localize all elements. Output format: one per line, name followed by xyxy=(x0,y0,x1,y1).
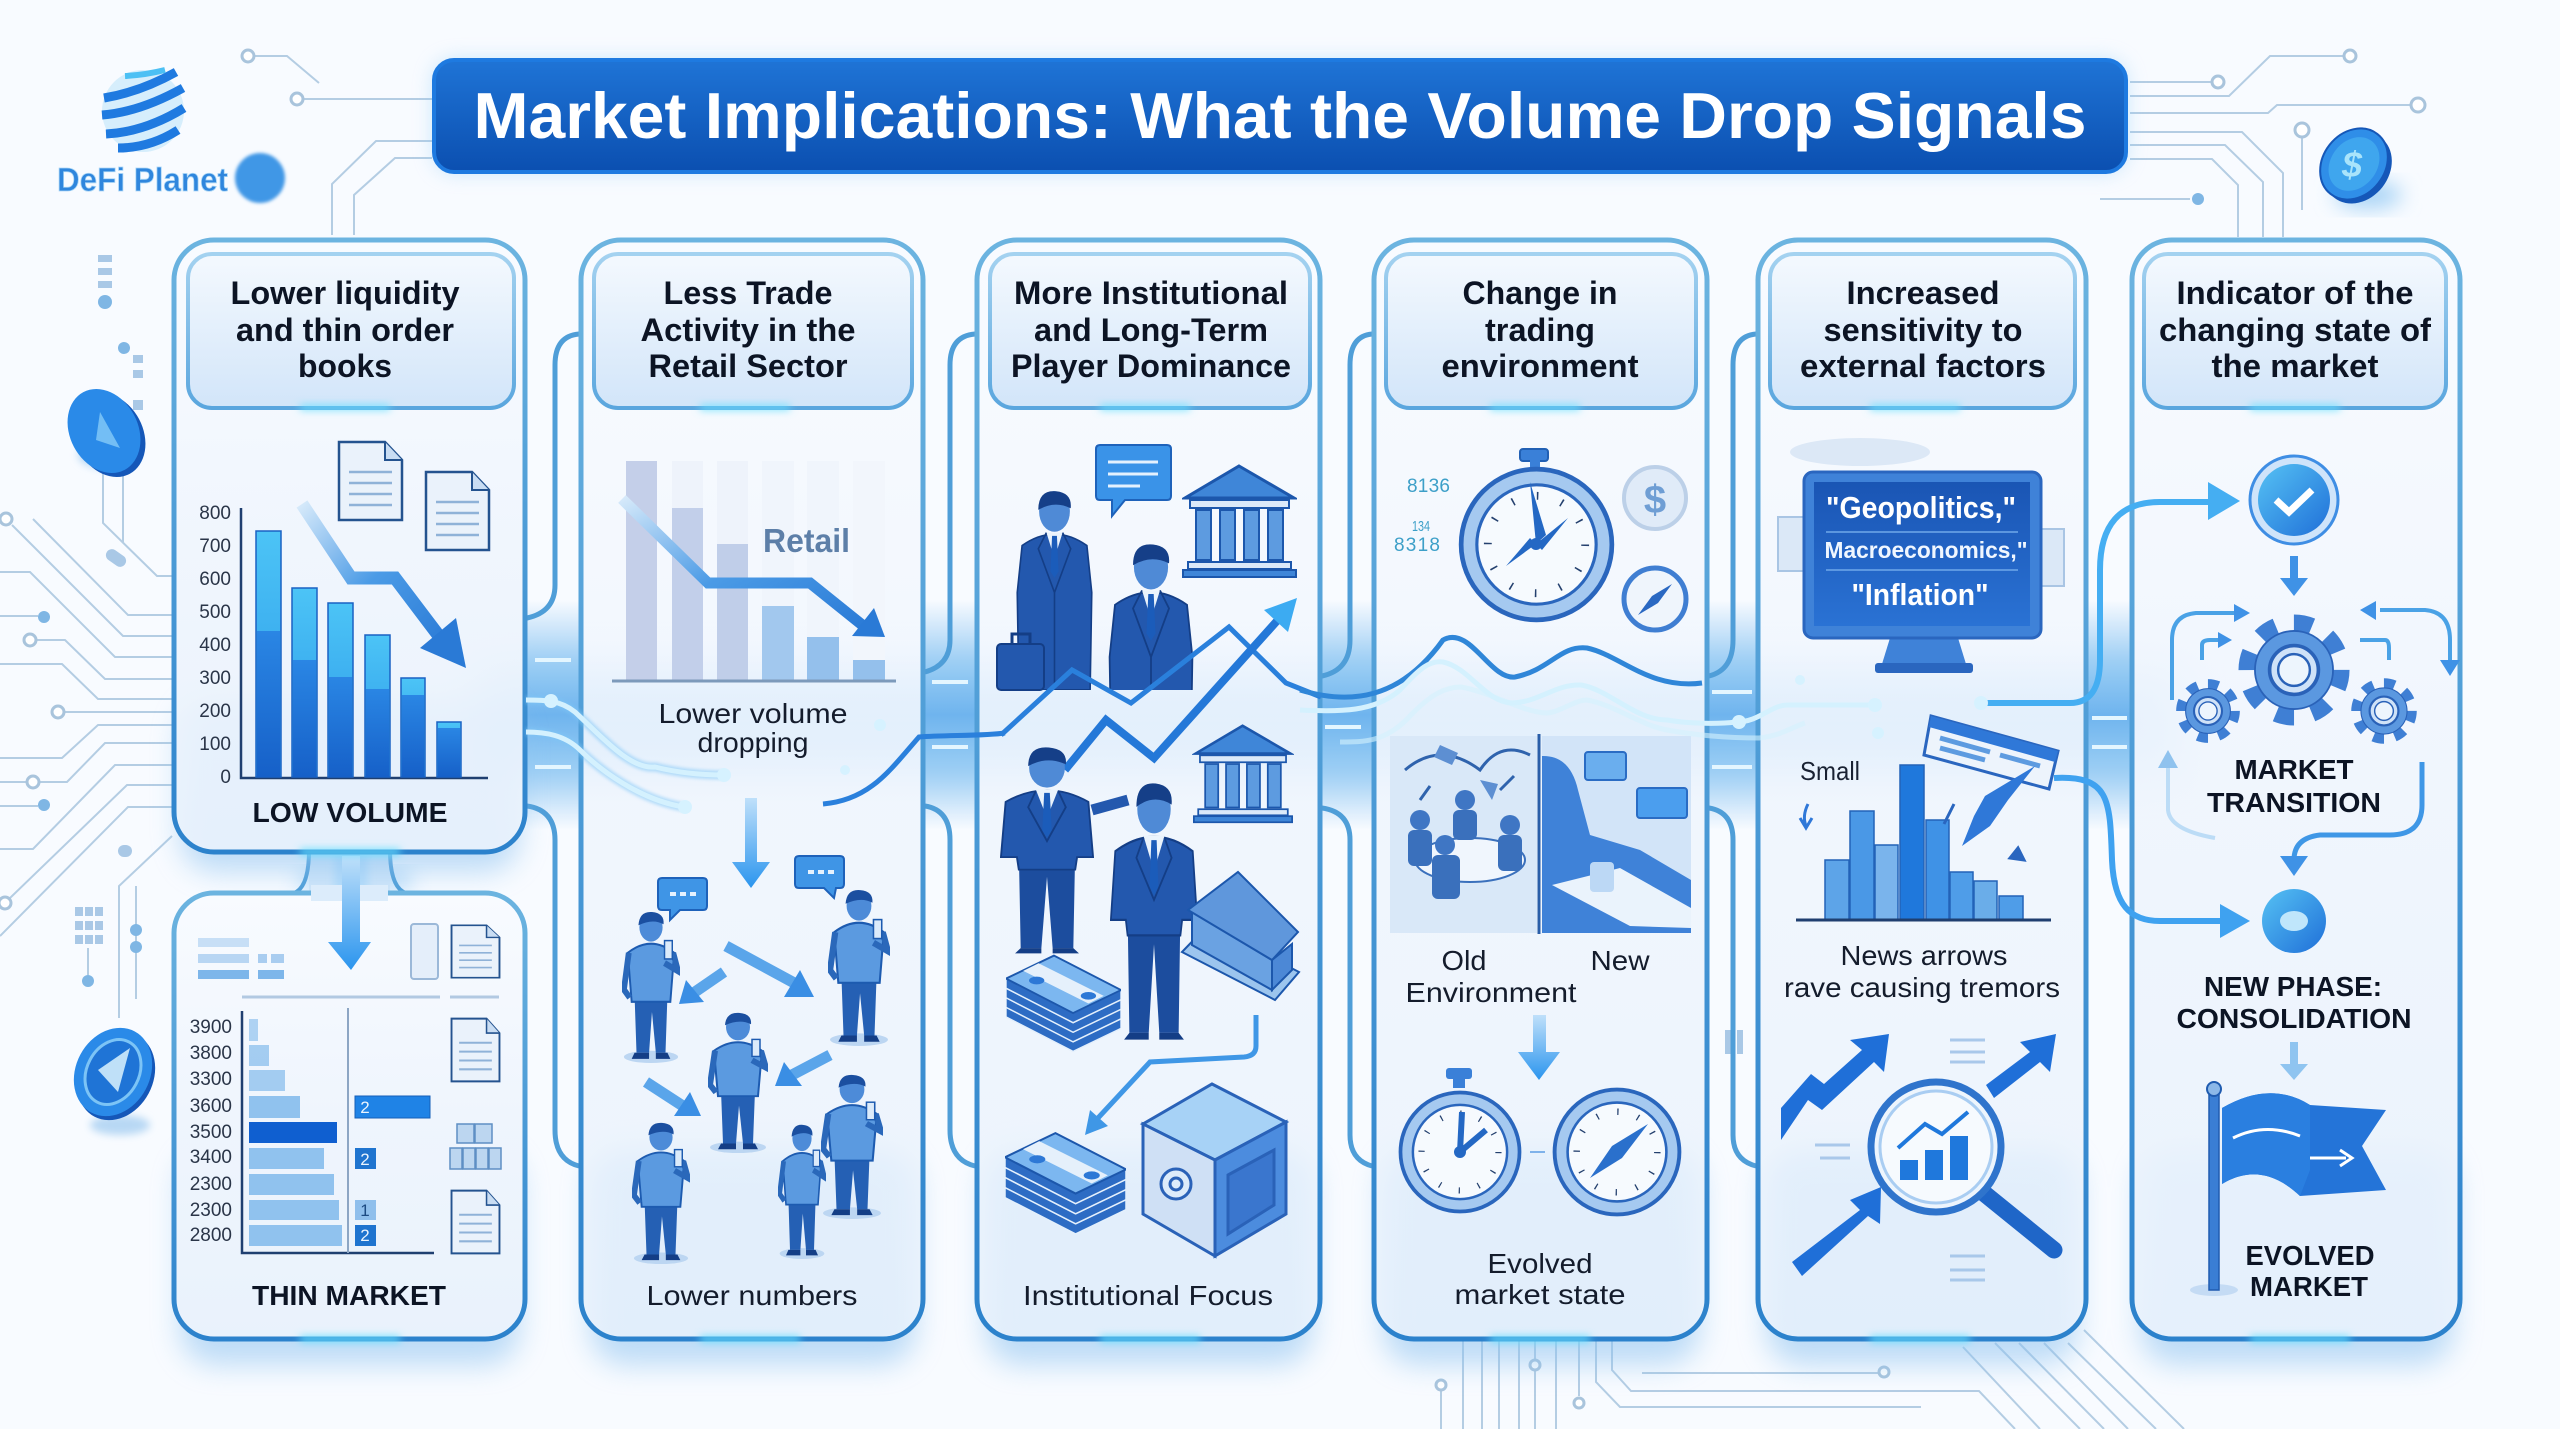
panel 3: less trade activity xyxy=(581,240,923,1339)
icon: dollar coin: $ xyxy=(1644,478,1666,522)
icon: cash stack xyxy=(1006,956,1121,1051)
flow glow dots xyxy=(535,658,2127,814)
label: market transition: MARKET xyxy=(2234,754,2354,785)
icon: monitor with macro words: Macroeconomics," xyxy=(1824,537,2028,563)
icon: speech bubbles xyxy=(658,856,844,920)
bar chart: low volume: 100 xyxy=(199,734,231,755)
label: evolved market xyxy=(2246,1240,2374,1302)
heading: indicator of changing state: changing state of xyxy=(2159,312,2431,348)
icon: news bulletin and pen xyxy=(1924,716,2058,789)
panel connector lines xyxy=(527,334,1756,1166)
bar chart: low volume xyxy=(199,503,488,788)
arrow: flow to institutional focus xyxy=(1098,1015,1256,1118)
icon: safe xyxy=(1143,1084,1286,1256)
heading: change in trading environment xyxy=(1386,254,1696,408)
chart line: rising trend xyxy=(1001,598,1321,770)
panel 2: thin market xyxy=(174,856,525,1339)
label: lower numbers: Lower numbers xyxy=(646,1280,858,1311)
icon: evolved market flag xyxy=(2190,1082,2386,1296)
central glow band xyxy=(300,600,2180,890)
heading: institutional dominance: and Long-Term xyxy=(1034,312,1268,348)
arrow: low volume to thin market xyxy=(328,856,371,970)
panel 4: institutional dominance xyxy=(977,240,1321,1339)
panel 6: increased sensitivity xyxy=(1758,240,2086,1339)
icon: cash stack two xyxy=(1005,1133,1126,1234)
bar chart: low volume: 700 xyxy=(199,536,231,557)
logo: DeFi Planet: DeFi Planet xyxy=(57,161,228,198)
icon: monitor with macro words: "Geopolitics," xyxy=(1826,490,2016,525)
icon: retail traders group xyxy=(624,856,888,1264)
heading: increased sensitivity: external factors xyxy=(1800,348,2046,384)
heading: indicator of changing state xyxy=(2144,254,2446,408)
title banner: Market Implications: What the Volume Drop Signals xyxy=(474,79,2086,152)
arrows between traders xyxy=(646,946,830,1108)
bar chart: thin market order book: 3900 xyxy=(190,1017,232,1038)
bar chart: thin market order book: 3800 xyxy=(190,1043,232,1064)
icon: isometric bank xyxy=(1182,872,1299,1000)
icon: monitor with macro words xyxy=(1778,438,2064,673)
bar chart: thin market order book: 2300 xyxy=(190,1174,232,1195)
arrow: check to gears xyxy=(2280,556,2308,596)
heading: change in trading environment: Change in xyxy=(1462,275,1618,311)
illustration: old versus new environment xyxy=(1390,734,1691,934)
icon: small order bars and docs xyxy=(198,924,499,997)
bar chart: thin market order book: 3600 xyxy=(190,1096,232,1117)
bar chart: news tremors xyxy=(1796,756,2051,920)
logo: DeFi Planet xyxy=(57,70,285,203)
heading: increased sensitivity: Increased xyxy=(1846,275,2000,311)
bar chart: thin market order book: 2 xyxy=(360,1226,370,1245)
icon: stopwatch with ticker numbers: 8318 xyxy=(1394,535,1440,556)
caption: lower volume dropping: dropping xyxy=(698,727,808,758)
labels: old and new xyxy=(1406,945,1650,1008)
label: evolved market state: market state xyxy=(1454,1279,1626,1310)
arrow: transition loop xyxy=(2158,750,2422,876)
bar chart: thin market order book xyxy=(190,1008,434,1253)
title banner xyxy=(434,60,2126,172)
caption: news arrows xyxy=(1784,940,2060,1003)
heading: less trade activity xyxy=(594,254,912,408)
icon: check circle xyxy=(2250,456,2338,544)
connector between low volume and thin market xyxy=(290,850,410,944)
heading: lower liquidity: Lower liquidity xyxy=(230,275,460,311)
caption: news arrows: News arrows xyxy=(1840,940,2008,971)
label: evolved market state: Evolved xyxy=(1488,1248,1592,1279)
gap strips between panels xyxy=(527,600,2132,830)
icon: lower executives and bank xyxy=(1001,726,1292,1040)
icon: order documents xyxy=(339,442,489,550)
bar chart: low volume: 500 xyxy=(199,602,231,623)
icon: upper executives, bubble and bank xyxy=(996,444,1297,691)
label: new phase consolidation xyxy=(2176,971,2412,1034)
icon: stopwatch with ticker numbers: 134 xyxy=(1412,518,1430,535)
heading: institutional dominance: More Institutional xyxy=(1014,275,1288,311)
labels: old and new: Environment xyxy=(1406,977,1577,1008)
bar chart: low volume: 200 xyxy=(199,701,231,722)
icon: stopwatch with ticker numbers: 8136 xyxy=(1407,476,1450,497)
logo: blurred mark xyxy=(235,153,285,203)
icon: monitor with macro words: "Inflation" xyxy=(1852,577,1988,612)
arrow: down to crowd xyxy=(732,798,770,888)
label: low volume: LOW VOLUME xyxy=(252,797,448,828)
heading: institutional dominance xyxy=(990,254,1310,408)
heading: less trade activity: Retail Sector xyxy=(648,348,848,384)
bar chart: thin market order book: 2800 xyxy=(190,1225,232,1246)
heading: increased sensitivity xyxy=(1770,254,2075,408)
bar chart: low volume: 800 xyxy=(199,503,231,524)
panel soft shadows xyxy=(180,700,2454,1365)
caption: lower volume dropping xyxy=(658,698,848,758)
arrow: down to evolved state xyxy=(1518,1015,1560,1080)
panel 5: change in trading environment xyxy=(1300,240,1707,1339)
wave line xyxy=(1300,637,1702,697)
icon: side documents xyxy=(450,1019,501,1253)
chart: retail volume falling: Retail xyxy=(763,522,850,559)
bar chart: low volume: 400 xyxy=(199,635,231,656)
icon: stopwatch and compass xyxy=(1400,1068,1679,1214)
heading: increased sensitivity: sensitivity to xyxy=(1824,312,2022,348)
labels: old and new: New xyxy=(1590,945,1650,976)
label: new phase consolidation: NEW PHASE: xyxy=(2204,971,2382,1002)
icon: dollar coin xyxy=(1624,467,1686,529)
label: evolved market state xyxy=(1454,1248,1626,1310)
bar chart: low volume: 300 xyxy=(199,668,231,689)
caption: news arrows: rave causing tremors xyxy=(1784,972,2060,1003)
heading: lower liquidity: books xyxy=(298,348,392,384)
heading: change in trading environment: environment xyxy=(1442,348,1639,384)
label: evolved market: MARKET xyxy=(2250,1271,2368,1302)
heading: indicator of changing state: the market xyxy=(2212,348,2379,384)
label: institutional focus: Institutional Focus xyxy=(1023,1280,1273,1311)
icon: small compass xyxy=(1624,568,1686,630)
label: evolved market: EVOLVED xyxy=(2246,1240,2374,1271)
heading: less trade activity: Activity in the xyxy=(640,312,856,348)
heading: lower liquidity xyxy=(188,254,514,408)
bar chart: thin market order book: 2300 xyxy=(190,1200,232,1221)
icon: left coin top xyxy=(53,376,160,490)
bar chart: thin market order book: 2 xyxy=(360,1098,370,1117)
panel 1: lower liquidity xyxy=(174,240,525,852)
bar chart: news tremors: Small xyxy=(1800,756,1860,786)
panel 7: indicator of changing state xyxy=(2132,240,2460,1339)
label: thin market: THIN MARKET xyxy=(252,1280,446,1311)
label: market transition xyxy=(2207,754,2381,818)
icon: new phase node xyxy=(2262,889,2326,953)
illustration: new environment xyxy=(1542,736,1691,933)
illustration: old environment xyxy=(1390,736,1537,933)
logo: striped globe xyxy=(102,70,184,152)
icon: stopwatch with ticker numbers xyxy=(1394,449,1612,620)
heading: less trade activity: Less Trade xyxy=(664,275,832,311)
arrow: phase to flag xyxy=(2280,1042,2308,1080)
panel bottom highlights xyxy=(300,405,2350,1342)
bar chart: thin market order book: 1 xyxy=(360,1201,370,1220)
caption: lower volume dropping: Lower volume xyxy=(658,698,848,729)
icon: market transition gears xyxy=(2172,601,2460,738)
label: new phase consolidation: CONSOLIDATION xyxy=(2176,1003,2412,1034)
heading: indicator of changing state: Indicator of the xyxy=(2176,275,2414,311)
labels: old and new: Old xyxy=(1442,945,1486,976)
bar chart: thin market order book: 3500 xyxy=(190,1122,232,1143)
heading: lower liquidity: and thin order xyxy=(236,312,454,348)
icon: right coin: $ xyxy=(2341,144,2363,185)
label: market transition: TRANSITION xyxy=(2207,787,2381,818)
icon: left coin bottom xyxy=(59,1014,170,1135)
bar chart: low volume: 0 xyxy=(220,767,231,788)
bar chart: thin market order book: 2 xyxy=(360,1150,370,1169)
icon: rising arrows and magnifier xyxy=(1781,1034,2056,1280)
bar chart: thin market order book: 3300 xyxy=(190,1069,232,1090)
chart: retail volume falling xyxy=(612,461,896,681)
flow lines across the band xyxy=(526,482,2250,938)
heading: change in trading environment: trading xyxy=(1485,312,1595,348)
bar chart: thin market order book: 3400 xyxy=(190,1147,232,1168)
heading: institutional dominance: Player Dominance xyxy=(1011,348,1291,384)
bar chart: low volume: 600 xyxy=(199,569,231,590)
icon: right coin xyxy=(2306,115,2406,217)
